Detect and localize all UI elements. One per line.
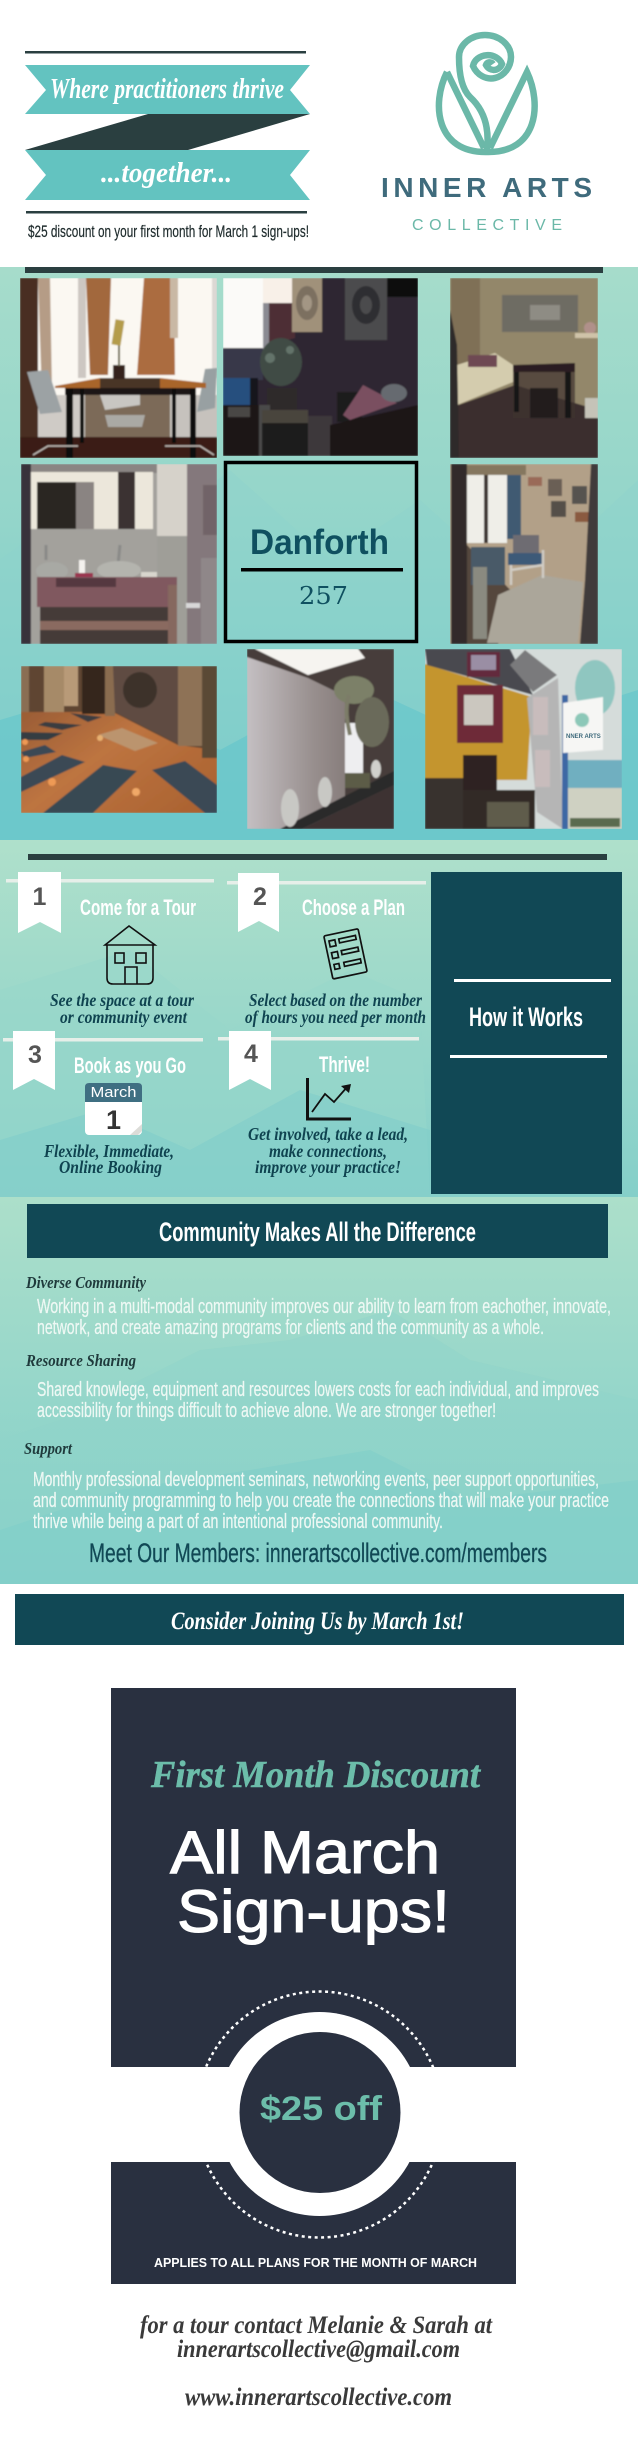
step 4: thrive: Get involved, take a lead,	[248, 1124, 408, 1144]
logo: Inner Arts Collective: COLLECTIVE	[412, 217, 562, 234]
header ribbon banner: $25 discount on your first month for March 1 sign-ups!	[28, 222, 309, 241]
contact details	[140, 2312, 493, 2411]
panel: photo section background	[0, 267, 638, 840]
panel: Danforth 257 label	[226, 462, 416, 642]
photo: sitting room	[450, 464, 598, 644]
contact details: www.innerartscollective.com	[185, 2384, 452, 2411]
panel: discount poster: Sign-ups!	[177, 1878, 450, 1945]
step 1: come for a tour: See the space at a tour	[50, 990, 194, 1010]
icon: calendar: 1	[106, 1105, 121, 1135]
photo: bathroom vanity	[21, 464, 217, 644]
step 3: book as you go: Book as you Go	[74, 1053, 186, 1078]
panel: discount poster	[111, 1688, 516, 2284]
white band and ring	[111, 2012, 516, 2216]
panel: discount poster: First Month Discount	[150, 1754, 481, 1796]
photo: dining room	[20, 278, 217, 458]
header ribbon banner: Where practitioners thrive	[50, 74, 284, 105]
panel: community section	[0, 1197, 638, 1584]
text block: support	[24, 1439, 609, 1533]
header ribbon banner: ...together...	[101, 157, 232, 189]
step 4: thrive: Thrive!	[319, 1052, 370, 1077]
text block: diverse community	[25, 1273, 611, 1339]
photo: yoga room	[21, 666, 217, 813]
step 1: come for a tour: 1	[33, 883, 47, 911]
heading bar: consider joining	[15, 1594, 624, 1645]
discount circle	[240, 2032, 400, 2193]
step 3: book as you go	[3, 1031, 203, 1177]
header ribbon banner	[25, 51, 310, 241]
step 2: choose a plan: Select based on the number	[249, 990, 422, 1010]
logo: Inner Arts Collective: INNER ARTS	[381, 172, 592, 203]
panel: Danforth 257 label: 257	[299, 582, 348, 610]
how it works title block: How it Works	[469, 1002, 583, 1032]
heading bar: consider joining: Consider Joining Us by March 1st!	[171, 1608, 464, 1635]
step 1: come for a tour	[6, 872, 214, 1027]
panel: Danforth 257 label: Danforth	[250, 523, 389, 562]
text block: resource sharing: Resource Sharing	[25, 1351, 136, 1370]
step 2: choose a plan	[227, 873, 426, 1027]
panel: how it works section	[0, 840, 638, 1197]
photo: house exterior with sign	[425, 649, 622, 829]
icon: checklist document	[324, 929, 367, 979]
panel: discount poster: All March	[170, 1819, 440, 1886]
dotted ring	[196, 1992, 442, 2238]
sign lettering: NNER ARTS	[566, 734, 601, 740]
icon: rising line chart	[308, 1078, 351, 1119]
step 3: book as you go: Flexible, Immediate,	[43, 1141, 174, 1161]
text block: support: Support	[24, 1439, 73, 1458]
heading bar: community makes all the difference	[27, 1204, 608, 1258]
heading bar: community makes all the difference: Community Makes All the Difference	[159, 1217, 476, 1247]
contact details: for a tour contact Melanie & Sarah at	[140, 2312, 493, 2339]
step 4: thrive: make connections,	[269, 1141, 387, 1161]
step 4: thrive: improve your practice!	[255, 1157, 401, 1177]
step 1: come for a tour: Come for a Tour	[80, 895, 196, 920]
photo: treatment room with bed	[450, 278, 598, 458]
icon: calendar: March	[90, 1084, 136, 1101]
step 2: choose a plan: Choose a Plan	[302, 895, 405, 920]
step 2: choose a plan: of hours you need per month	[245, 1007, 426, 1027]
panel: discount poster: APPLIES TO ALL PLANS FOR THE MONTH OF MARCH	[154, 2255, 477, 2270]
how it works title block	[431, 872, 622, 1194]
text block: resource sharing	[25, 1351, 599, 1422]
text block: diverse community: Diverse Community	[25, 1273, 146, 1292]
contact details: innerartscollective@gmail.com	[177, 2336, 460, 2363]
step 1: come for a tour: or community event	[60, 1007, 188, 1027]
text block: support: thrive while being a part of an intentional professional community.	[33, 1511, 443, 1533]
step 2: choose a plan: 2	[253, 883, 267, 911]
step 4: thrive	[218, 1031, 419, 1177]
photo: lounge with art	[223, 278, 418, 456]
step 4: thrive: 4	[244, 1040, 258, 1068]
photo: skylight with lanterns	[247, 649, 394, 829]
step 3: book as you go: Online Booking	[59, 1157, 162, 1177]
icon: house	[105, 926, 155, 984]
logo: Inner Arts Collective	[381, 35, 592, 234]
step 3: book as you go: 3	[28, 1041, 42, 1069]
icon: calendar	[85, 1083, 142, 1135]
panel: discount poster: $25 off	[260, 2090, 383, 2128]
